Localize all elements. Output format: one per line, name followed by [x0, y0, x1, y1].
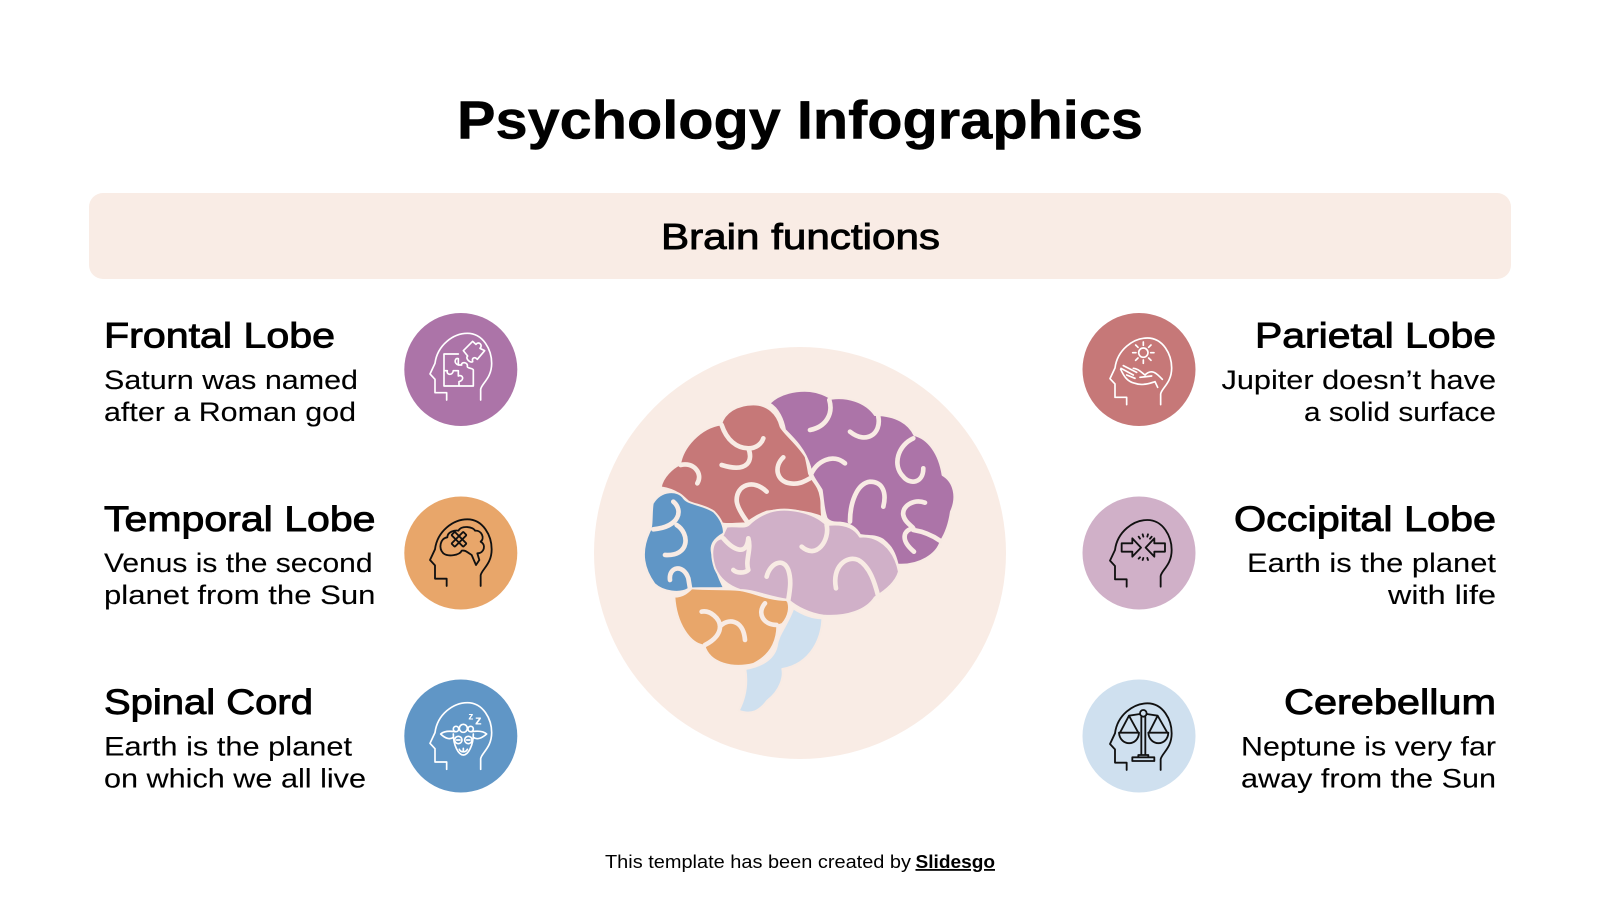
- panel: Parietal Lobe text: a solid surface: [1304, 397, 1496, 427]
- icon: Spinal Cord sheep head: z: [468, 711, 473, 722]
- panel: Parietal Lobe text: [1222, 316, 1496, 427]
- header banner: Brain functions: Brain functions: [661, 216, 940, 257]
- orange region: [674, 588, 789, 666]
- panel: Temporal Lobe text: [104, 500, 376, 610]
- panel: Spinal Cord text: Spinal Cord: [104, 683, 313, 722]
- panel: Frontal Lobe text: Frontal Lobe: [104, 316, 335, 356]
- icon: Frontal Lobe puzzle head: [404, 313, 517, 426]
- panel: Temporal Lobe text: Temporal Lobe: [104, 500, 376, 539]
- icon: Spinal Cord sheep head: [404, 680, 517, 792]
- panel: Frontal Lobe text: Saturn was named: [104, 365, 358, 395]
- icon: Occipital Lobe arrows head: [1082, 496, 1196, 610]
- icon: Temporal Lobe brain head: [404, 496, 517, 610]
- panel: Spinal Cord text: Earth is the planet: [104, 732, 353, 762]
- panel: Frontal Lobe text: [104, 316, 358, 427]
- panel: Cerebellum text: Neptune is very far: [1241, 732, 1496, 762]
- panel: Spinal Cord text: on which we all live: [104, 764, 366, 794]
- blue region: [644, 492, 724, 592]
- panel: Occipital Lobe text: [1234, 500, 1497, 610]
- parietal region: [769, 391, 954, 565]
- frontal region: [661, 404, 822, 524]
- footer credit: Slidesgo: [916, 852, 995, 872]
- footer credit: This template has been created by: [605, 852, 911, 872]
- panel: Cerebellum text: [1241, 683, 1496, 794]
- panel: Parietal Lobe text: Parietal Lobe: [1255, 316, 1496, 356]
- header banner: Brain functions: [89, 193, 1511, 279]
- brain illustration: [594, 347, 1006, 759]
- title: Psychology Infographics: [457, 90, 1143, 150]
- panel: Spinal Cord text: [104, 683, 366, 794]
- panel: Temporal Lobe text: Venus is the second: [104, 548, 372, 578]
- panel: Parietal Lobe text: Jupiter doesn’t have: [1222, 365, 1496, 395]
- panel: Occipital Lobe text: with life: [1387, 580, 1496, 610]
- lilac region: [712, 510, 899, 616]
- panel: Cerebellum text: Cerebellum: [1284, 683, 1496, 722]
- icon: Spinal Cord sheep head: z: [475, 712, 482, 727]
- brain stem: [739, 608, 822, 713]
- panel: Occipital Lobe text: Earth is the planet: [1247, 548, 1497, 578]
- panel: Occipital Lobe text: Occipital Lobe: [1234, 500, 1496, 539]
- panel: Frontal Lobe text: after a Roman god: [104, 397, 356, 427]
- panel: Cerebellum text: away from the Sun: [1241, 764, 1496, 794]
- icon: Parietal Lobe sun and hand head: [1082, 313, 1196, 426]
- icon: Cerebellum scales head: [1082, 680, 1196, 792]
- panel: Temporal Lobe text: planet from the Sun: [104, 580, 376, 610]
